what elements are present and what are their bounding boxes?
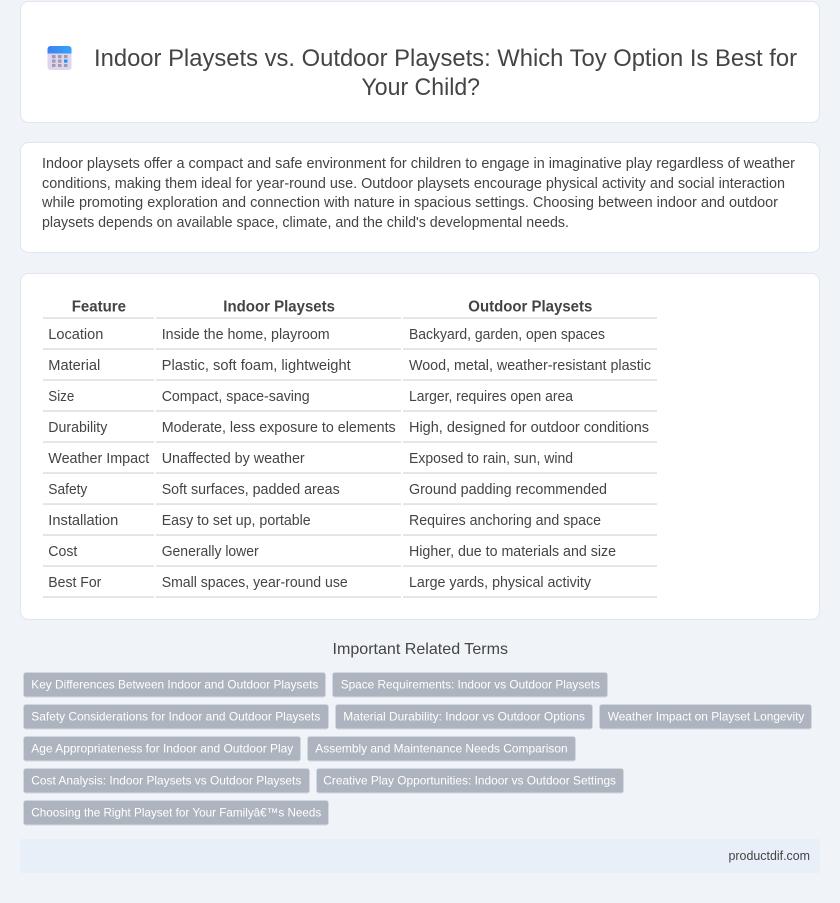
row: Best For: Large yards, physical activity [409, 575, 592, 591]
row: Cost: Generally lower [162, 544, 259, 560]
table header: Outdoor Playsets [468, 298, 592, 316]
row: Durability: Durability [48, 420, 108, 436]
row: Cost: Higher, due to materials and size [409, 544, 616, 560]
row: Size: Larger, requires open area [409, 389, 573, 405]
title: Your Child? [362, 74, 480, 101]
row: Installation: Requires anchoring and space [409, 513, 601, 529]
tag: weather impact [600, 704, 812, 729]
footer text: productdif.com [728, 849, 810, 863]
row: Durability [48, 420, 649, 436]
tag: space requirements: Space Requirements: Indoor vs Outdoor Playsets [341, 678, 600, 692]
intro text panel [20, 142, 820, 252]
row: Weather Impact: Exposed to rain, sun, wind [409, 451, 573, 467]
intro text: Indoor playsets offer a compact and safe environment for children to engage in imaginative play regardless of weather [42, 156, 795, 172]
tag: weather impact: Weather Impact on Playset Longevity [608, 710, 804, 724]
row: Material: Plastic, soft foam, lightweight [162, 358, 351, 374]
table header: Feature [72, 298, 126, 316]
tag: age appropriateness [24, 736, 300, 761]
tag: cost analysis [24, 768, 310, 793]
table header: Indoor Playsets [223, 298, 335, 316]
row: Cost [48, 544, 616, 560]
footer bar [20, 839, 820, 873]
row: Durability: High, designed for outdoor conditions [409, 420, 649, 436]
title [94, 45, 797, 101]
row: Durability: Moderate, less exposure to elements [162, 420, 396, 436]
row: Best For: Small spaces, year-round use [162, 575, 348, 591]
intro text [41, 156, 795, 231]
row: Safety: Ground padding recommended [409, 482, 607, 498]
intro text: conditions, making them ideal for year-round use. Outdoor playsets encourage physical activity and social interaction [42, 176, 785, 192]
row: Installation: Easy to set up, portable [162, 513, 311, 529]
row: Location: Backyard, garden, open spaces [409, 327, 605, 343]
title: Indoor Playsets vs. Outdoor Playsets: Which Toy Option Is Best for [94, 45, 797, 72]
tag: key differences [24, 672, 326, 697]
row: Size [48, 389, 573, 405]
tag: safety considerations [24, 704, 328, 729]
tag: choosing the right playset [24, 800, 328, 825]
row: Size: Size [48, 389, 74, 405]
tag: space requirements [332, 672, 608, 697]
row: Cost: Cost [48, 544, 77, 560]
tag: choosing the right playset: Choosing the Right Playset for Your Familyâ€™s Needs [31, 806, 321, 820]
tag: assembly and maintenance: Assembly and Maintenance Needs Comparison [315, 742, 568, 756]
table header [72, 298, 592, 316]
row: Safety [48, 482, 607, 498]
tag: creative play: Creative Play Opportunities: Indoor vs Outdoor Settings [323, 774, 616, 788]
row: Location: Inside the home, playroom [162, 327, 330, 343]
header panel [20, 2, 820, 122]
row: Best For: Best For [48, 575, 101, 591]
related terms heading: Important Related Terms [332, 641, 508, 658]
row: Best For [48, 575, 592, 591]
row: Weather Impact: Weather Impact [48, 451, 149, 467]
row: Weather Impact: Unaffected by weather [162, 451, 305, 467]
tag: safety considerations: Safety Considerations for Indoor and Outdoor Playsets [31, 710, 320, 724]
row: Weather Impact [48, 451, 573, 467]
row: Safety: Soft surfaces, padded areas [162, 482, 340, 498]
tag: assembly and maintenance [308, 736, 576, 761]
related terms tags [24, 672, 812, 825]
row: Installation: Installation [48, 513, 118, 529]
tag: material durability: Material Durability: Indoor vs Outdoor Options [343, 710, 585, 724]
row: Safety: Safety [48, 482, 88, 498]
tag: cost analysis: Cost Analysis: Indoor Playsets vs Outdoor Playsets [31, 774, 301, 788]
row: Location: Location [48, 327, 103, 343]
row: Material: Wood, metal, weather-resistant plastic [409, 358, 651, 374]
row: Size: Compact, space-saving [162, 389, 310, 405]
row: Location [48, 327, 605, 343]
intro text: while promoting exploration and connection with nature in spacious settings. Choosing between indoor and outdoor [41, 195, 778, 211]
tag: key differences: Key Differences Between Indoor and Outdoor Playsets [31, 678, 318, 692]
row: Material: Material [48, 358, 100, 374]
tag: creative play [316, 768, 624, 793]
icon: calendar [48, 46, 72, 70]
row: Installation [48, 513, 601, 529]
tag: age appropriateness: Age Appropriateness for Indoor and Outdoor Play [31, 742, 293, 756]
comparison table panel [20, 274, 820, 620]
tag: material durability [336, 704, 592, 729]
row: Material [48, 358, 651, 374]
intro text: playsets depends on available space, climate, and the child's developmental needs. [42, 215, 569, 231]
